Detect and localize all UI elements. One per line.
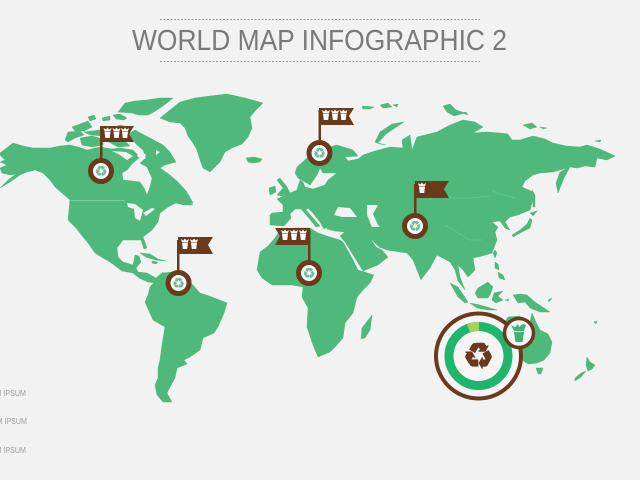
marker: Asia: ♻ xyxy=(409,219,421,235)
title: WORLD MAP INFOGRAPHIC 2 xyxy=(132,25,507,57)
Great Lakes and channels xyxy=(112,150,160,221)
Eurasia xyxy=(270,120,615,290)
Arctic islands xyxy=(118,98,173,115)
Caribbean islands xyxy=(140,253,166,261)
Iceland xyxy=(246,157,262,163)
outer ring xyxy=(436,314,521,398)
donut callout xyxy=(436,314,534,398)
marker: Europe xyxy=(309,108,354,164)
Greenland xyxy=(160,94,263,172)
Great Britain and Ireland xyxy=(269,178,290,196)
legend text xyxy=(0,389,27,455)
world map xyxy=(0,94,615,402)
Africa xyxy=(257,228,374,357)
icon badge: plant pot xyxy=(504,318,534,348)
Canada and United States border xyxy=(71,200,125,202)
seas and lakes xyxy=(334,205,380,227)
marker: North America: ♻ xyxy=(95,164,107,180)
progress ring xyxy=(449,326,508,386)
marker: North America xyxy=(90,126,134,182)
Newfoundland xyxy=(183,194,193,204)
marker: Asia xyxy=(404,181,449,236)
Svalbard and Arctic Russia islands xyxy=(362,103,601,145)
South America xyxy=(145,272,227,402)
Sakhalin and Japan xyxy=(512,190,538,237)
marker: Africa xyxy=(275,228,320,284)
marker: Africa: ♻ xyxy=(303,266,315,282)
icon: recycling: ♻ xyxy=(463,337,494,377)
marker: South America xyxy=(168,237,213,294)
progress segment xyxy=(468,326,479,328)
Asian country borders xyxy=(430,190,515,240)
North America xyxy=(0,98,193,283)
Southeast Asia and Oceania xyxy=(361,250,597,381)
marker: South America: ♻ xyxy=(172,276,185,292)
marker: Europe: ♻ xyxy=(313,146,326,162)
